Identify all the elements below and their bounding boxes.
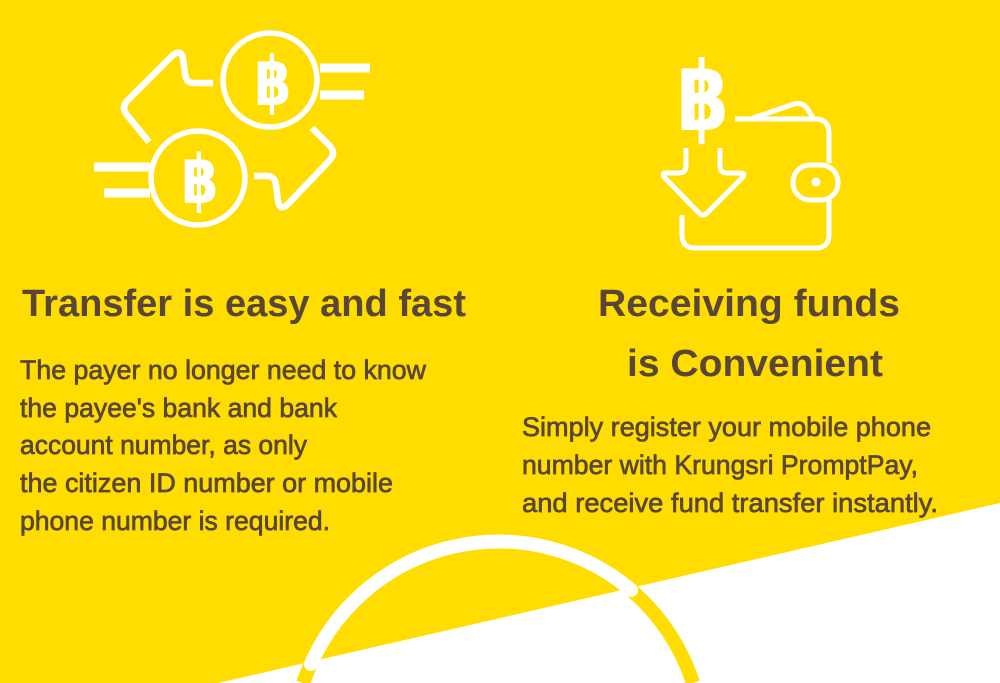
heading: receiving funds: is Convenient <box>627 343 883 385</box>
background: white diagonal wedge <box>218 503 1000 683</box>
text block: receiving description: and receive fund transfer instantly. <box>522 488 938 518</box>
icon: baht into wallet <box>663 42 838 248</box>
text block: transfer description: phone number is required. <box>20 506 330 536</box>
text block: receiving description <box>522 412 938 518</box>
decorative ring: white arc on yellow <box>311 542 631 664</box>
heading: transfer: Transfer is easy and fast <box>22 283 466 325</box>
text block: transfer description: account number, as only <box>20 430 307 460</box>
text block: receiving description: Simply register your mobile phone <box>522 412 931 442</box>
text block: transfer description: the payee's bank and bank <box>20 393 337 423</box>
heading: receiving funds <box>598 283 900 385</box>
text block: transfer description: the citizen ID number or mobile <box>20 468 393 498</box>
text block: transfer description: The payer no longer need to know <box>20 355 426 385</box>
icon: baht transfer: ฿ <box>182 141 218 220</box>
decorative ring: yellow arc on white <box>303 590 693 683</box>
text block: receiving description: number with Krungsri PromptPay, <box>522 450 918 480</box>
icon: baht transfer <box>94 33 370 225</box>
text block: transfer description <box>20 355 426 536</box>
icon: baht transfer: ฿ <box>255 43 291 122</box>
icon: baht into wallet: ฿ <box>677 42 729 153</box>
heading: receiving funds: Receiving funds <box>598 283 900 325</box>
